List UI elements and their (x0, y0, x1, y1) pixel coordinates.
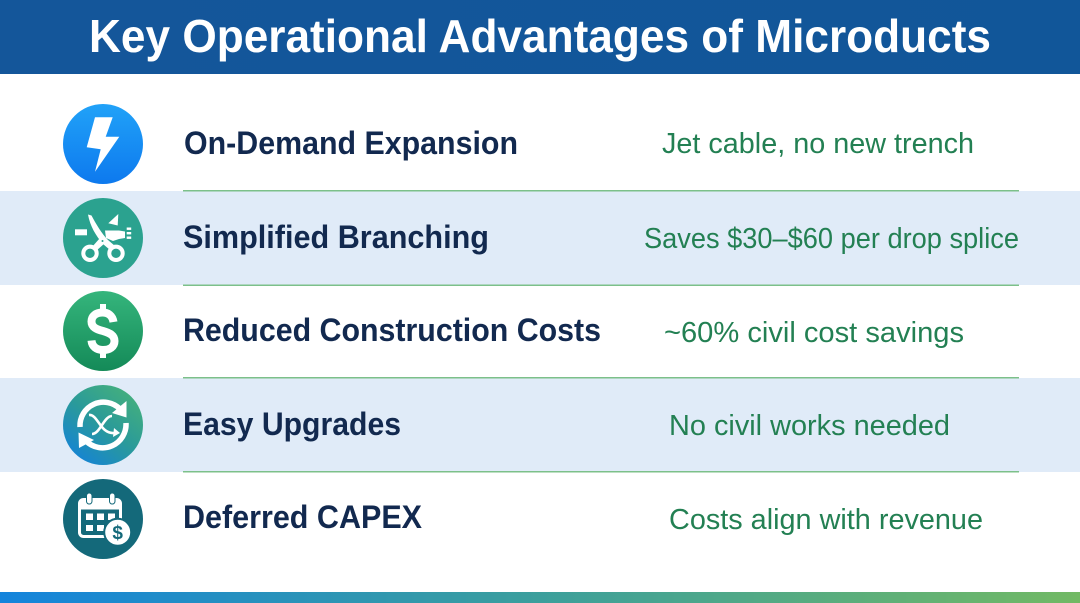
icon: calendar with dollar coin: $ (112, 523, 123, 544)
icon: circular arrows (63, 385, 143, 465)
row: On-Demand Expansion (63, 104, 974, 184)
footer gradient bar (0, 592, 1080, 603)
icon: lightning bolt (63, 104, 143, 184)
heading: Deferred CAPEX: Deferred CAPEX (183, 499, 423, 535)
detail: no civil works: No civil works needed (669, 410, 950, 442)
heading: On-Demand Expansion: On-Demand Expansion (184, 125, 518, 161)
row: Simplified Branching (63, 198, 1019, 278)
row band: Simplified Branching (0, 191, 1080, 285)
title banner (0, 0, 1080, 74)
detail: costs align: Costs align with revenue (669, 504, 983, 536)
row: Easy Upgrades (63, 385, 950, 465)
heading: Easy Upgrades: Easy Upgrades (183, 406, 401, 442)
heading: Simplified Branching: Simplified Branching (183, 219, 489, 255)
icon: dollar sign (63, 291, 143, 371)
row band: Easy Upgrades (0, 378, 1080, 472)
detail: jet cable: Jet cable, no new trench (662, 128, 974, 160)
icon: calendar with dollar coin (63, 479, 143, 559)
title: Key Operational Advantages of Microducts (89, 10, 991, 62)
detail: civil savings: ~60% civil cost savings (664, 317, 964, 349)
row: Deferred CAPEX (63, 479, 983, 559)
icon: scissors cutting cable (63, 198, 143, 278)
row: Reduced Construction Costs (63, 291, 964, 371)
heading: Reduced Construction Costs: Reduced Construction Costs (183, 312, 601, 348)
detail: splice savings: Saves $30–$60 per drop splice (644, 223, 1019, 255)
